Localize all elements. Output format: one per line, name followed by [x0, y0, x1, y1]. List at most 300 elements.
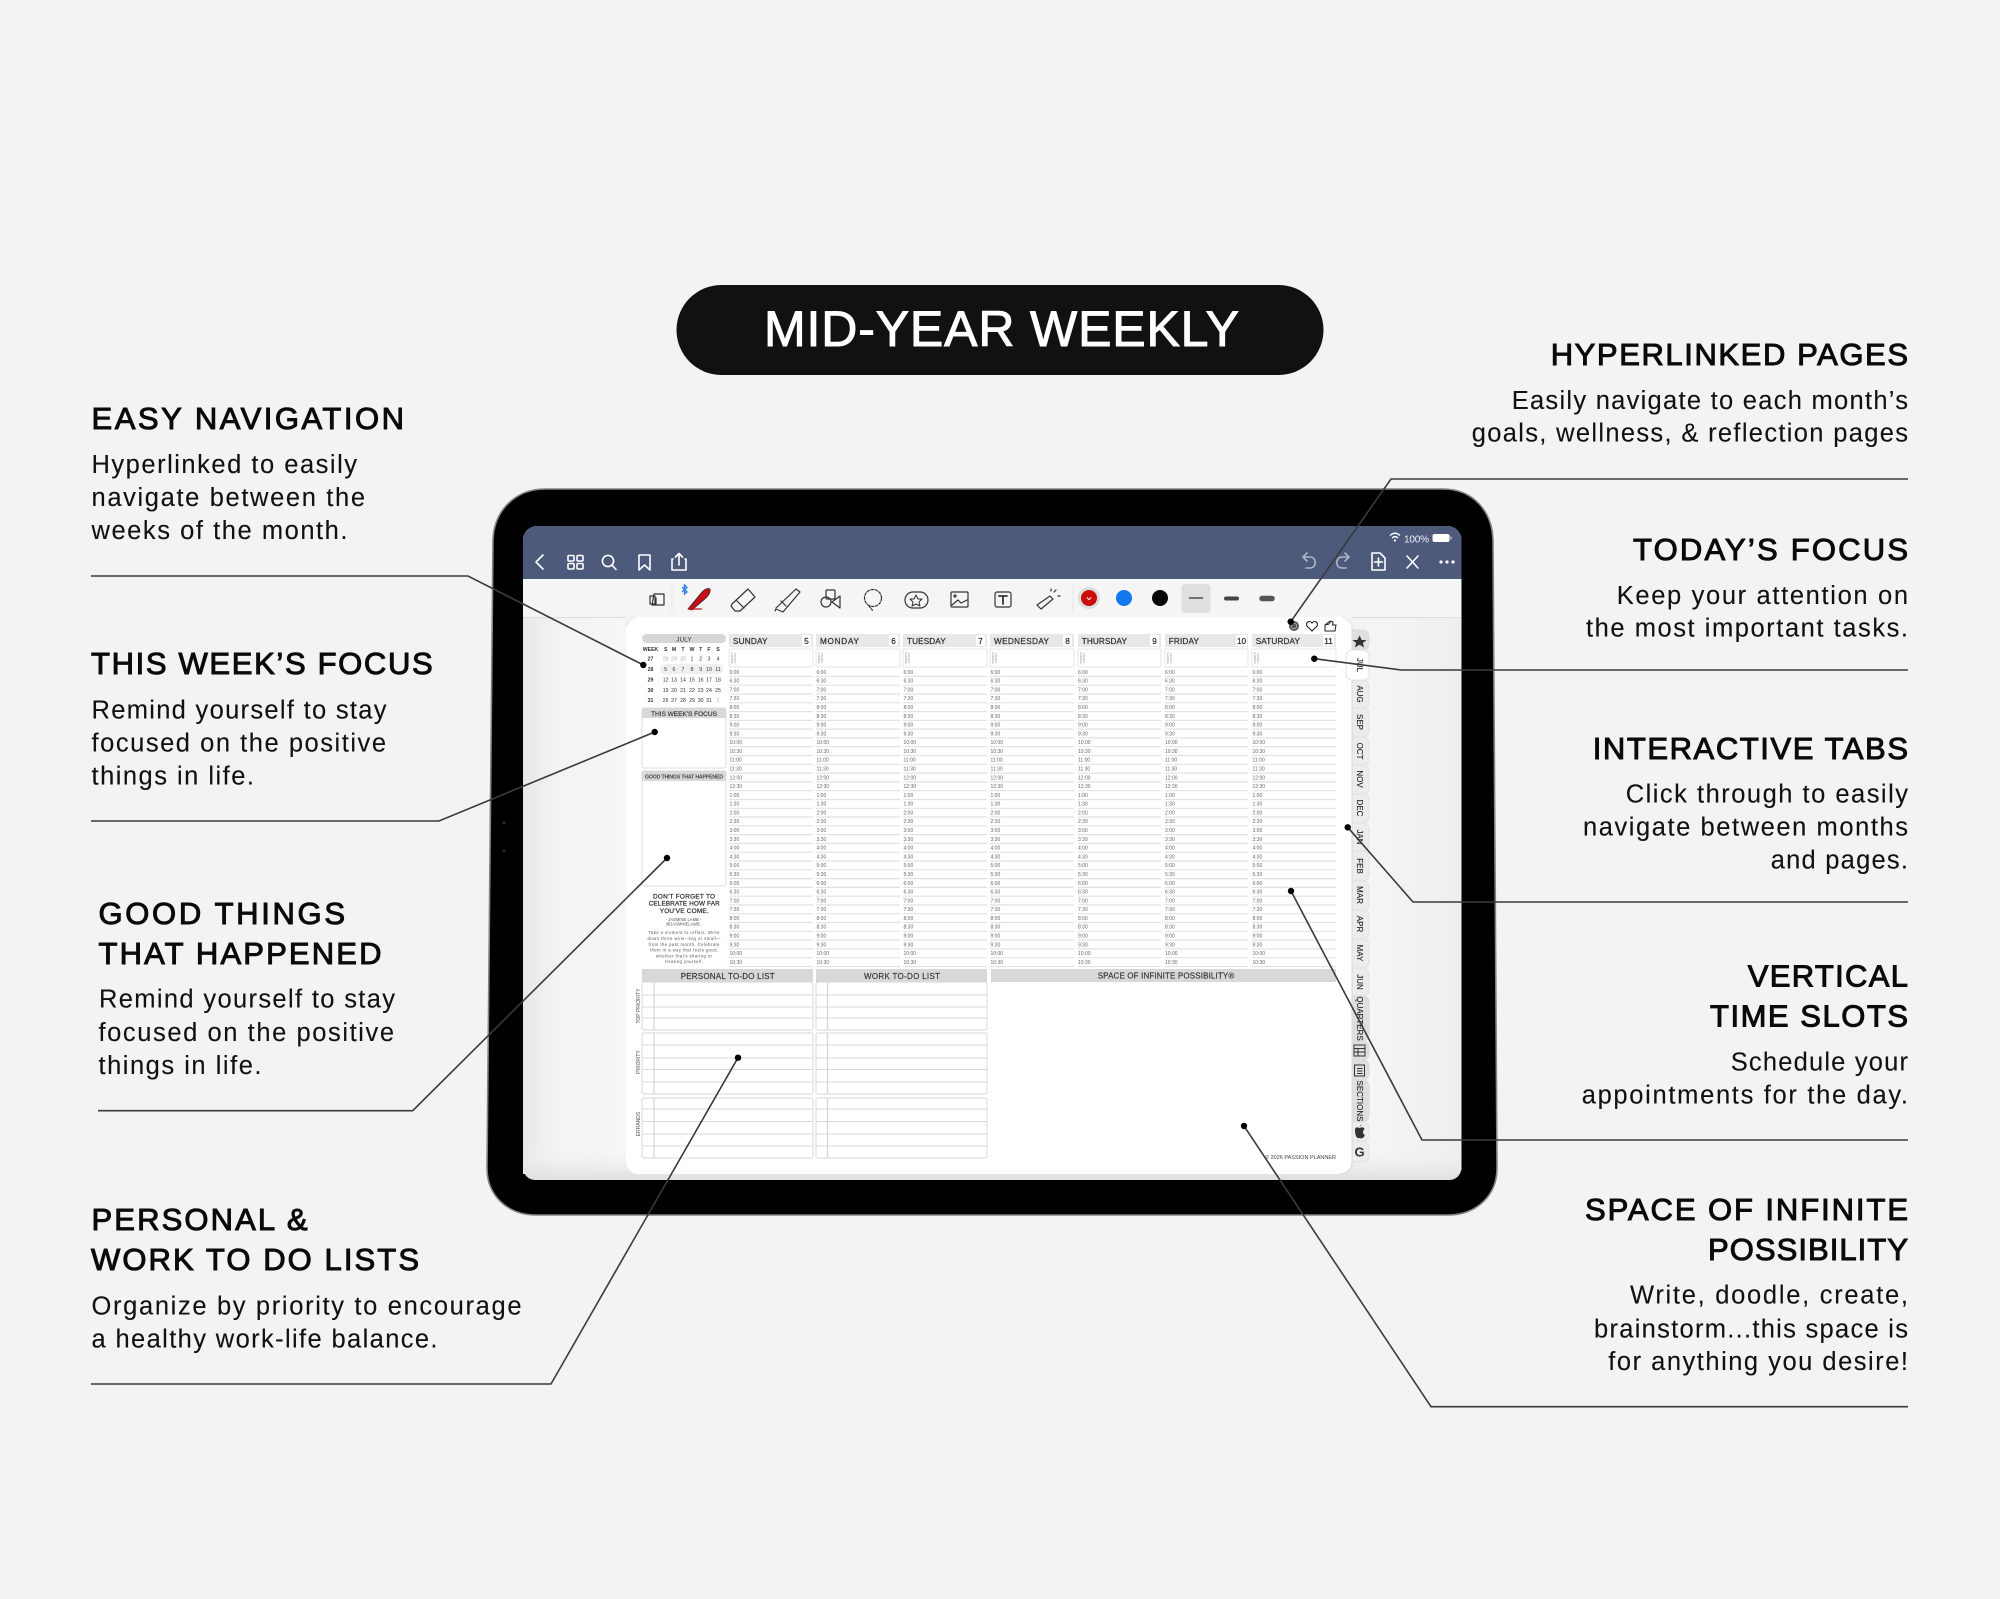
description: Easily navigate to each month’s	[1512, 387, 1908, 415]
time column: Tuesday: 3:30	[904, 837, 913, 843]
time column: Tuesday: 8:30	[904, 714, 913, 720]
time column: Saturday: 1:30	[1252, 802, 1262, 808]
time column: Friday: 8:00	[1165, 705, 1175, 711]
time column: Tuesday: 3:00	[904, 828, 913, 834]
callout: today's focus	[1311, 532, 1908, 670]
description	[1582, 1049, 1908, 1109]
mini calendar: 25	[715, 688, 721, 694]
time column: Friday: 10:00	[1165, 740, 1178, 746]
time column: Sunday: 12:30	[730, 784, 742, 790]
mini calendar: 20	[671, 688, 677, 694]
time column: Wednesday: 1:30	[990, 802, 1000, 808]
time column: Friday: 7:30	[1165, 907, 1175, 913]
description: things in life.	[98, 1052, 262, 1080]
heading	[1710, 959, 1908, 1034]
time column: Saturday: 8:30	[1252, 925, 1262, 931]
title pill: MID-YEAR WEEKLY	[764, 301, 1239, 357]
time column: Sunday: 3:30	[730, 837, 739, 843]
time column: Thursday: 5:00	[1078, 863, 1088, 869]
time column: Monday: 10:00	[816, 740, 829, 746]
reflection quote: @JASMINELAMB.	[666, 922, 701, 926]
time column: Thursday: 9:00	[1078, 722, 1088, 728]
time column: Friday: 1:30	[1165, 802, 1175, 808]
callout: personal and work to do lists	[91, 1054, 741, 1384]
time column: Monday: 2:00	[816, 810, 826, 816]
callout: easy navigation	[90, 401, 646, 668]
today's focus boxes: FOCUS	[994, 653, 998, 663]
description	[92, 696, 387, 790]
time column: Monday: 5:30	[816, 872, 826, 878]
description	[1472, 387, 1908, 448]
time column: Friday: 12:30	[1165, 784, 1178, 790]
time column: Sunday: 7:00	[730, 898, 739, 904]
to-do row labels	[636, 988, 642, 1136]
time column: Saturday: 8:00	[1252, 916, 1262, 922]
time column: Friday: 1:00	[1165, 793, 1175, 799]
heading: POSSIBILITY	[1708, 1232, 1908, 1267]
description	[98, 986, 395, 1080]
description	[1586, 582, 1908, 643]
time column: Sunday: 11:00	[730, 758, 742, 764]
good things that happened box: GOOD THINGS THAT HAPPENED	[645, 774, 723, 780]
time column: Tuesday: 10:30	[904, 749, 916, 755]
leader line	[98, 855, 670, 1111]
time column: Monday: 11:30	[816, 766, 829, 772]
reflection quote: from the past month. Celebrate	[648, 942, 720, 947]
pen width options	[1182, 584, 1272, 613]
screen	[523, 526, 1462, 1180]
time column: Sunday: 7:30	[730, 907, 739, 913]
time column: Thursday: 1:30	[1078, 802, 1088, 808]
time column: Thursday: 3:30	[1078, 837, 1088, 843]
description: focused on the positive	[98, 1019, 394, 1047]
time column: Tuesday: 1:30	[904, 802, 913, 808]
time column: Wednesday: 11:30	[990, 766, 1003, 772]
today's focus boxes: TODAY'S	[1166, 652, 1170, 664]
time column: Monday: 6:30	[816, 890, 826, 896]
heading: WORK TO DO LISTS	[91, 1242, 419, 1277]
callout: interactive tabs	[1344, 731, 1908, 902]
time column: Saturday: 6:00	[1252, 670, 1262, 676]
tab labels	[1352, 636, 1366, 1160]
today's focus boxes: TODAY'S	[817, 652, 821, 664]
heading: TIME SLOTS	[1710, 999, 1908, 1034]
time column: Friday: 9:00	[1165, 722, 1175, 728]
mini calendar: 29	[671, 656, 677, 662]
time column: Sunday: 2:30	[730, 819, 739, 825]
time column: Friday: 6:00	[1165, 881, 1175, 887]
colour swatches	[1078, 587, 1168, 609]
time column: Saturday: 10:30	[1252, 749, 1265, 755]
time column: Sunday: 9:00	[730, 722, 739, 728]
time column: Wednesday: 10:30	[990, 960, 1003, 966]
time column: Saturday: 5:30	[1252, 872, 1262, 878]
day headers: 5	[804, 637, 809, 646]
heading: THAT HAPPENED	[98, 936, 382, 971]
time column: Thursday: 11:00	[1078, 758, 1090, 764]
side tabs	[1340, 630, 1369, 1162]
description: goals, wellness, & reflection pages	[1472, 420, 1908, 448]
time column: Saturday: 2:00	[1252, 810, 1262, 816]
time column: Saturday: 1:00	[1252, 793, 1262, 799]
mini calendar: 29	[689, 698, 695, 704]
drawing toolbar	[523, 579, 1462, 618]
time column: Thursday: 9:30	[1078, 942, 1088, 948]
description: focused on the positive	[92, 729, 386, 757]
time column: Saturday: 2:30	[1252, 819, 1262, 825]
time column: Friday: 6:30	[1165, 890, 1175, 896]
time column: Tuesday: 11:30	[904, 766, 916, 772]
time column: Friday: 8:30	[1165, 714, 1175, 720]
time column: Friday: 2:30	[1165, 819, 1175, 825]
time column: Tuesday: 4:00	[904, 846, 913, 852]
mini calendar: JULY	[676, 636, 692, 643]
reflection quote: - JASMINE LAMB -	[666, 917, 702, 922]
time column: Sunday: 4:30	[730, 854, 739, 860]
time column: Tuesday: 7:30	[904, 696, 913, 702]
mini calendar: 16	[698, 678, 704, 684]
time column: Wednesday: 2:00	[990, 810, 1000, 816]
to-do row labels: ERRANDS	[636, 1111, 642, 1136]
time column: Thursday: 8:00	[1078, 916, 1088, 922]
time column: Friday: 5:00	[1165, 863, 1175, 869]
time column: Sunday: 6:00	[730, 881, 739, 887]
time column: Monday: 8:00	[816, 916, 826, 922]
mini calendar: 5	[664, 667, 667, 673]
time column: Wednesday: 8:30	[990, 714, 1000, 720]
day headers: SUNDAY	[733, 637, 768, 646]
time column: Monday: 7:00	[816, 687, 826, 693]
time column: Thursday: 10:00	[1078, 740, 1091, 746]
to-do list headers	[642, 969, 1336, 982]
mini calendar: 28	[663, 656, 669, 662]
mini calendar: S	[664, 647, 668, 653]
today's focus boxes: FOCUS	[1082, 653, 1086, 663]
day headers: 10	[1237, 637, 1246, 646]
time column: Sunday: 7:30	[730, 696, 739, 702]
reflection quote: them in a way that feels good,	[650, 948, 718, 953]
mini calendar: 15	[689, 678, 695, 684]
mini calendar: 23	[698, 688, 704, 694]
time column: Monday: 3:30	[816, 837, 826, 843]
time column: Saturday	[1252, 670, 1265, 966]
time column: Sunday: 8:30	[730, 714, 739, 720]
title pill	[676, 285, 1324, 375]
mini calendar: 28	[648, 667, 653, 673]
time column: Wednesday: 6:00	[990, 881, 1000, 887]
time column: Sunday: 5:00	[730, 863, 739, 869]
time column: Sunday: 8:00	[730, 916, 739, 922]
mini calendar: 12	[663, 678, 669, 684]
hourly grid lines	[729, 670, 1336, 968]
time column: Thursday: 1:00	[1078, 793, 1088, 799]
time column: Monday: 7:30	[816, 907, 826, 913]
active JUL tab	[1346, 650, 1369, 680]
tab labels: G	[1354, 1144, 1365, 1160]
time column: Wednesday: 4:30	[990, 854, 1000, 860]
day headers: THURSDAY	[1082, 637, 1128, 646]
time column: Monday: 5:00	[816, 863, 826, 869]
time column: Saturday: 12:30	[1252, 784, 1265, 790]
time column: Wednesday: 7:00	[990, 687, 1000, 693]
time column: Wednesday: 10:00	[990, 951, 1003, 957]
heading: TODAY’S FOCUS	[1633, 532, 1908, 567]
day headers: 8	[1065, 637, 1070, 646]
time column: Monday: 9:00	[816, 722, 826, 728]
time column: Saturday: 10:30	[1252, 960, 1265, 966]
time column: Wednesday: 8:30	[990, 925, 1000, 931]
time column: Thursday: 9:30	[1078, 731, 1088, 737]
tablet body	[487, 489, 1497, 1215]
status bar: wifi and battery: 100%	[1404, 534, 1429, 546]
time column: Friday: 7:00	[1165, 687, 1175, 693]
time column: Saturday: 3:00	[1252, 828, 1262, 834]
day headers: WEDNESDAY	[994, 637, 1050, 646]
time column: Friday: 10:30	[1165, 749, 1178, 755]
description: weeks of the month.	[90, 517, 348, 545]
heading	[98, 896, 382, 971]
time column: Saturday: 9:30	[1252, 731, 1262, 737]
time column: Monday: 4:30	[816, 854, 826, 860]
day headers: 6	[891, 637, 896, 646]
time column: Thursday: 2:00	[1078, 810, 1088, 816]
time column: Thursday	[1078, 670, 1091, 966]
time column: Monday: 6:30	[816, 679, 826, 685]
time column: Wednesday	[990, 670, 1003, 966]
today's focus boxes: FOCUS	[1169, 653, 1173, 663]
callout: space of infinite possibility	[1241, 1123, 1908, 1407]
mini calendar: 3	[708, 656, 711, 662]
mini calendar: 31	[706, 698, 712, 704]
mini calendar: 27	[671, 698, 677, 704]
time column: Thursday: 12:00	[1078, 775, 1091, 781]
time column: Wednesday: 2:30	[990, 819, 1000, 825]
time column: Sunday: 10:00	[730, 740, 742, 746]
time column: Saturday: 11:00	[1252, 758, 1265, 764]
time column: Monday: 10:30	[816, 960, 829, 966]
mini calendar: 6	[673, 667, 676, 673]
time column: Monday: 10:30	[816, 749, 829, 755]
time column: Tuesday: 7:00	[904, 898, 913, 904]
time column: Tuesday: 10:30	[904, 960, 916, 966]
time column: Monday: 2:30	[816, 819, 826, 825]
description: Keep your attention on	[1617, 582, 1908, 610]
time column: Tuesday: 8:30	[904, 925, 913, 931]
heading	[91, 1202, 419, 1277]
time column: Monday: 9:00	[816, 934, 826, 940]
mini calendar: 22	[689, 688, 695, 694]
time column: Monday: 1:00	[816, 793, 826, 799]
time column: Wednesday: 9:00	[990, 722, 1000, 728]
time column: Tuesday: 8:00	[904, 916, 913, 922]
time column: Saturday: 6:30	[1252, 679, 1262, 685]
mini calendar: 31	[648, 698, 653, 704]
time column: Saturday: 4:30	[1252, 854, 1262, 860]
time column: Friday: 8:30	[1165, 925, 1175, 931]
time column: Friday: 4:30	[1165, 854, 1175, 860]
left header icons	[536, 554, 686, 570]
time column: Tuesday: 5:30	[904, 872, 913, 878]
leader line	[91, 729, 658, 821]
time column: Monday: 4:00	[816, 846, 826, 852]
time column: Thursday: 10:30	[1078, 749, 1091, 755]
time column: Tuesday: 9:30	[904, 942, 913, 948]
to-do list headers: SPACE OF INFINITE POSSIBILITY®	[1098, 972, 1234, 980]
callout: vertical time slots	[1288, 888, 1908, 1140]
mini calendar: 21	[680, 688, 686, 694]
time column: Wednesday: 3:30	[990, 837, 1000, 843]
to-do row labels: PRIORITY	[636, 1050, 642, 1074]
to-do list headers: WORK TO-DO LIST	[864, 972, 940, 981]
time column: Saturday: 9:30	[1252, 942, 1262, 948]
time column: Sunday: 5:30	[730, 872, 739, 878]
time column: Wednesday: 1:00	[990, 793, 1000, 799]
time column: Saturday: 8:30	[1252, 714, 1262, 720]
time column: Monday: 8:30	[816, 925, 826, 931]
time column: Monday: 8:00	[816, 705, 826, 711]
time column: Thursday: 7:00	[1078, 898, 1088, 904]
time column: Tuesday: 12:30	[904, 784, 916, 790]
time column: Tuesday: 10:00	[904, 740, 916, 746]
time column: Monday: 6:00	[816, 881, 826, 887]
time column: Friday: 9:00	[1165, 934, 1175, 940]
to-do row labels: TOP PRIORITY	[636, 988, 642, 1024]
time column: Saturday: 11:30	[1252, 766, 1265, 772]
time column: Wednesday: 6:30	[990, 890, 1000, 896]
time column: Saturday: 7:00	[1252, 898, 1262, 904]
time column: Saturday: 6:00	[1252, 881, 1262, 887]
time column: Wednesday: 8:00	[990, 705, 1000, 711]
callout: good things that happened	[98, 855, 670, 1111]
description: navigate between months	[1583, 814, 1908, 842]
time column: Sunday: 11:30	[730, 766, 742, 772]
mini calendar	[642, 634, 726, 704]
time column: Wednesday: 6:00	[990, 670, 1000, 676]
time column: Wednesday: 9:30	[990, 731, 1000, 737]
camera sensors	[502, 821, 506, 853]
reflection quote: treating yourself.	[665, 959, 703, 964]
leader line	[1311, 656, 1908, 670]
description: navigate between the	[92, 484, 365, 512]
reflection quote: Take a moment to reflect. Write	[648, 930, 720, 935]
time column: Monday	[816, 670, 829, 966]
mini calendar: 9	[699, 667, 702, 673]
time column: Wednesday: 12:00	[990, 775, 1003, 781]
time column: Friday: 8:00	[1165, 916, 1175, 922]
copyright: © 2026 PASSION PLANNER	[1265, 1154, 1336, 1161]
description: Click through to easily	[1626, 781, 1908, 809]
this week's focus box	[642, 708, 726, 768]
time column: Wednesday: 7:00	[990, 898, 1000, 904]
mini calendar: 18	[715, 678, 721, 684]
today's focus boxes: TODAY'S	[730, 652, 734, 664]
today's focus boxes: TODAY'S	[1079, 652, 1083, 664]
time column: Monday: 7:30	[816, 696, 826, 702]
tab labels: QUARTERS	[1355, 996, 1364, 1041]
tab labels: APR	[1355, 916, 1364, 932]
mini calendar: 17	[706, 678, 712, 684]
today's focus boxes	[729, 649, 1336, 667]
today's focus boxes: FOCUS	[1256, 653, 1260, 663]
description	[1594, 1281, 1908, 1376]
time column: Sunday: 1:00	[730, 793, 739, 799]
description: appointments for the day.	[1582, 1081, 1908, 1109]
mini calendar: F	[707, 647, 711, 653]
time column: Monday: 8:30	[816, 714, 826, 720]
time column: Thursday: 6:00	[1078, 670, 1088, 676]
callout: this week's focus	[91, 646, 658, 821]
heading: EASY NAVIGATION	[92, 401, 404, 436]
reflection quote: whether that's sharing or	[656, 953, 713, 958]
time column: Thursday: 10:30	[1078, 960, 1091, 966]
time column: Thursday: 7:00	[1078, 687, 1088, 693]
time column: Friday: 9:30	[1165, 942, 1175, 948]
reflection quote: DON'T FORGET TO	[653, 894, 715, 900]
time column: Tuesday: 8:00	[904, 705, 913, 711]
time column: Friday: 10:30	[1165, 960, 1178, 966]
callout: hyperlinked pages	[1288, 337, 1908, 625]
description: Organize by priority to encourage	[92, 1292, 522, 1320]
day headers	[729, 634, 1336, 647]
time column: Saturday: 12:00	[1252, 775, 1265, 781]
today's focus boxes: TODAY'S	[991, 652, 995, 664]
time column: Tuesday: 6:00	[904, 670, 913, 676]
time column: Friday: 6:30	[1165, 679, 1175, 685]
day headers: 7	[978, 637, 983, 646]
description: things in life.	[92, 762, 254, 790]
mini calendar: 30	[698, 698, 704, 704]
time column: Thursday: 7:30	[1078, 696, 1088, 702]
time column: Friday: 7:00	[1165, 898, 1175, 904]
reflection quote	[648, 894, 721, 964]
time column: Tuesday: 2:00	[904, 810, 913, 816]
leader line	[91, 576, 646, 668]
time column: Friday: 10:00	[1165, 951, 1178, 957]
to-do list grids	[642, 982, 987, 1158]
time column: Thursday: 2:30	[1078, 819, 1088, 825]
time column: Tuesday: 6:30	[904, 890, 913, 896]
time column: Tuesday: 9:00	[904, 934, 913, 940]
mini calendar: 26	[663, 698, 669, 704]
tab labels: SECTIONS	[1355, 1081, 1364, 1121]
time column: Friday: 12:00	[1165, 775, 1178, 781]
time column: Thursday: 9:00	[1078, 934, 1088, 940]
description: Schedule your	[1731, 1049, 1908, 1077]
time column: Wednesday: 12:30	[990, 784, 1003, 790]
day headers: MONDAY	[820, 637, 860, 646]
time column: Sunday: 9:30	[730, 942, 739, 948]
mini calendar: S	[716, 647, 720, 653]
time column: Wednesday: 9:00	[990, 934, 1000, 940]
time column: Thursday: 11:30	[1078, 766, 1090, 772]
leader line	[1241, 1123, 1908, 1407]
mini calendar: 2	[699, 656, 702, 662]
time column: Saturday: 9:00	[1252, 934, 1262, 940]
mini calendar: WEEK	[643, 647, 659, 653]
time column: Sunday	[730, 670, 742, 966]
heading: VERTICAL	[1748, 959, 1908, 994]
tab labels: NOV	[1355, 770, 1364, 788]
description: Write, doodle, create,	[1630, 1281, 1908, 1309]
time column: Tuesday	[904, 670, 916, 966]
tab labels: MAY	[1355, 945, 1364, 962]
time column: Monday: 9:30	[816, 731, 826, 737]
mini calendar: 4	[717, 656, 720, 662]
time column: Monday: 6:00	[816, 670, 826, 676]
description: Remind yourself to stay	[99, 986, 395, 1014]
tab labels: SEP	[1355, 714, 1364, 730]
time column: Wednesday: 11:00	[990, 758, 1003, 764]
